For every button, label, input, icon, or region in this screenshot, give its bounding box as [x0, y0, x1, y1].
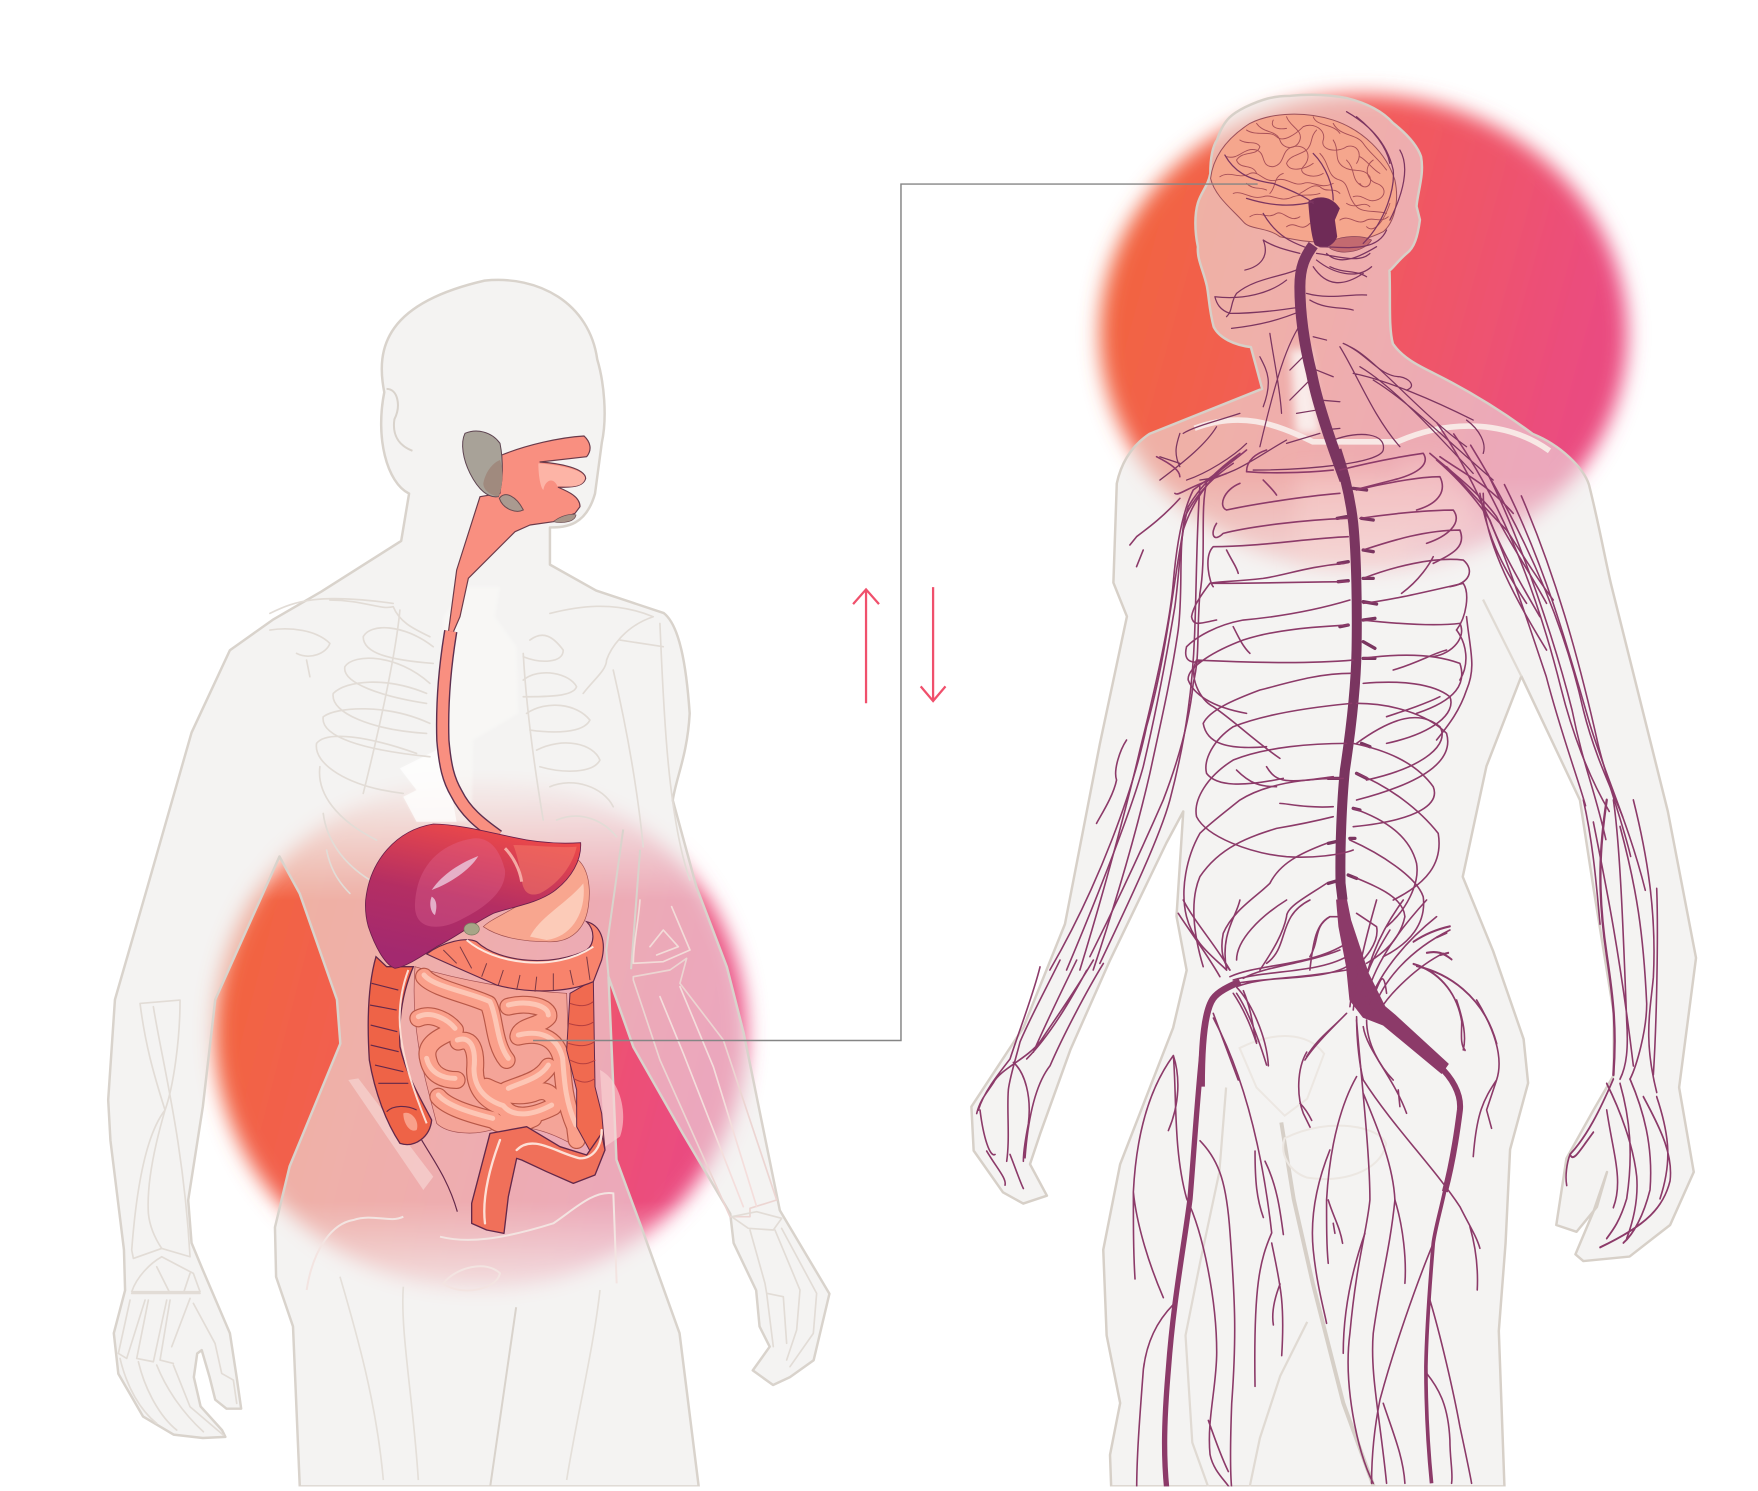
small intestine coils: outline — [418, 977, 577, 1140]
sigmoid highlight — [484, 1130, 602, 1223]
gallbladder — [464, 923, 479, 935]
right thoracic nerve loops — [1340, 453, 1472, 963]
salivary gland: parotid — [463, 431, 502, 497]
rectum tail — [422, 1140, 457, 1212]
right shoulder nerve bundle — [1430, 453, 1553, 650]
lumbar plexus and trunks origin — [1178, 900, 1450, 1087]
right skeleton shapes — [1195, 349, 1550, 1179]
stomach — [483, 857, 589, 942]
red glow: gut — [214, 773, 746, 1291]
small intestine coils: highlight — [418, 975, 576, 1125]
spinal cord — [1337, 450, 1357, 900]
descending colon — [567, 980, 605, 1160]
oral cavity and pharynx — [447, 436, 590, 643]
right body figure — [971, 95, 1696, 1486]
small intestine bed — [414, 967, 582, 1147]
left forearm, wrist and hand bones — [118, 1000, 237, 1435]
liver left lobe highlight — [513, 845, 577, 895]
right forearm and hand nerves — [1413, 800, 1671, 1247]
transverse colon folds — [443, 947, 590, 992]
salivary gland: submandibular — [499, 495, 523, 511]
connector line — [533, 184, 1258, 1041]
right leg nerves — [1312, 1000, 1499, 1483]
pelvis bones — [307, 1193, 617, 1290]
transverse colon — [427, 922, 603, 991]
rib outlines — [270, 599, 690, 893]
right hip branches — [1413, 926, 1497, 1050]
oesophagus fill — [443, 631, 498, 836]
upper spinal cord — [1300, 245, 1345, 480]
arrow: brain to gut — [921, 587, 945, 701]
left thoracic nerve loops — [1184, 450, 1353, 970]
iliac bar — [348, 1078, 433, 1190]
brain folds — [1220, 117, 1390, 229]
sigmoid colon and rectum — [472, 1127, 605, 1233]
left pelvis and femurs — [307, 1070, 623, 1480]
left arm, hand and left leg nerves — [977, 960, 1312, 1489]
descending colon segments — [568, 1002, 595, 1082]
right arm nerves — [1437, 423, 1645, 890]
ascending colon haustra — [370, 983, 417, 1112]
cauda bundle — [1337, 900, 1448, 1073]
left trunk origin — [1202, 982, 1240, 1087]
arrow: gut to brain — [853, 589, 879, 703]
white margin at page bottom — [0, 1486, 1758, 1491]
femurs — [340, 1277, 600, 1480]
digestive system: mouth and pharynx — [447, 431, 590, 643]
head nerve branches — [1160, 112, 1493, 480]
liver shine — [430, 856, 478, 915]
left chest skeleton — [270, 587, 690, 893]
plexus branches — [1178, 900, 1450, 1080]
right trunk lower section — [1426, 1190, 1445, 1483]
liver lobe highlight — [415, 838, 505, 927]
ascending colon highlight — [403, 1113, 417, 1131]
cerebellum — [1330, 236, 1372, 252]
left hand and forearm nerves — [977, 960, 1103, 1189]
sternum and spine — [400, 587, 518, 822]
ascending colon — [368, 957, 432, 1145]
oesophagus outline — [443, 631, 498, 836]
small intestine coils: fill — [418, 977, 577, 1140]
liver — [365, 824, 581, 968]
left elbow and forearm bones — [633, 900, 817, 1367]
left hip and leg branches — [1133, 987, 1312, 1489]
right trunk knee section — [1438, 1065, 1460, 1192]
left trunk — [1165, 1045, 1203, 1489]
abdominal organs — [365, 824, 605, 1233]
left shoulder and arm nerve bundle — [1050, 450, 1247, 970]
brain stem — [1308, 197, 1340, 247]
tongue highlight — [538, 463, 585, 490]
transverse colon fat band — [467, 940, 593, 963]
liver ligament — [505, 848, 522, 882]
parotid overlap — [483, 460, 502, 497]
hip crest — [600, 1070, 623, 1147]
spinal root stubs — [1328, 488, 1377, 883]
brain and nerves of the head — [1160, 112, 1493, 480]
right forearm nerves — [1583, 800, 1657, 1092]
brain — [1211, 114, 1397, 242]
torso nerves and spinal cord — [1050, 450, 1553, 970]
right hand nerves — [1566, 1079, 1671, 1247]
stomach highlight — [530, 883, 584, 940]
left body figure — [108, 280, 829, 1486]
red glow: brain — [1100, 95, 1627, 573]
ascending colon fat band — [400, 970, 427, 1123]
salivary gland: sublingual — [553, 514, 576, 523]
lower spine highlight — [400, 747, 457, 822]
right leg branches — [1312, 1000, 1499, 1483]
